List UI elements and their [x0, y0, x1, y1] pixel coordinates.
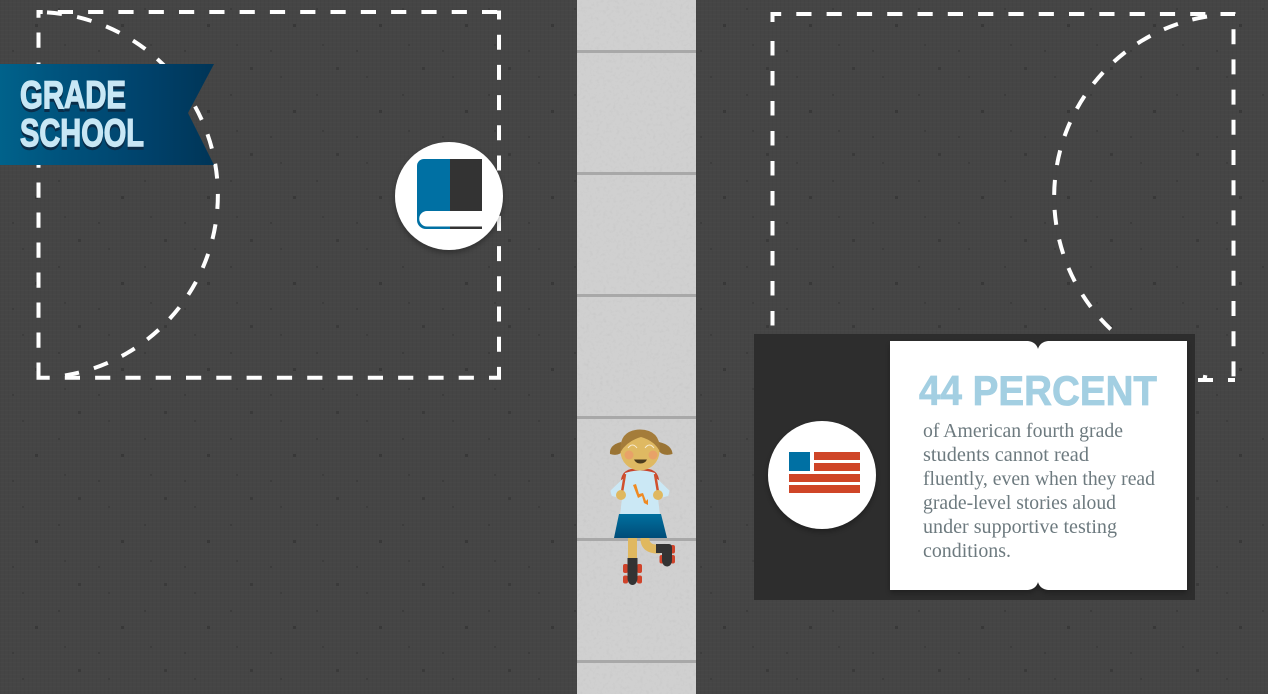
hair — [620, 430, 660, 452]
stat description: students cannot read — [923, 445, 1089, 466]
grade school ribbon — [0, 64, 214, 165]
skirt — [614, 514, 667, 538]
stat description — [923, 421, 1155, 562]
ribbon heading: GRADE — [20, 77, 126, 120]
standing leg and skate — [623, 537, 642, 585]
stat description: fluently, even when they read — [923, 469, 1155, 490]
girl on roller skates — [610, 430, 675, 585]
right dashed court — [771, 12, 1235, 380]
ribbon heading: SCHOOL — [20, 112, 144, 155]
eyes and mouth — [628, 445, 654, 464]
stat description: under supportive testing — [923, 517, 1117, 538]
head — [620, 432, 660, 470]
cheeks — [624, 450, 658, 460]
ribbon heading: GRADE — [20, 74, 126, 117]
hands — [616, 490, 663, 500]
left dashed court — [36, 10, 501, 378]
icon: book — [395, 142, 503, 250]
shirt and sleeves — [612, 470, 668, 515]
stat description: of American fourth grade — [923, 421, 1123, 442]
ribbon heading — [20, 74, 144, 158]
stat description: grade-level stories aloud — [923, 493, 1116, 514]
ribbon heading: SCHOOL — [20, 115, 144, 158]
stat heading: 44 PERCENT — [919, 367, 1157, 414]
straps over shirt — [622, 474, 658, 492]
lightning bolt — [633, 484, 648, 505]
icon: american flag — [768, 421, 876, 529]
open book page — [890, 341, 1187, 590]
pigtails — [610, 442, 672, 455]
backpack straps — [621, 469, 659, 482]
stat description: conditions. — [923, 541, 1011, 562]
bent leg and skate — [645, 537, 675, 567]
sidewalk — [577, 0, 696, 694]
stat card — [754, 334, 1195, 600]
